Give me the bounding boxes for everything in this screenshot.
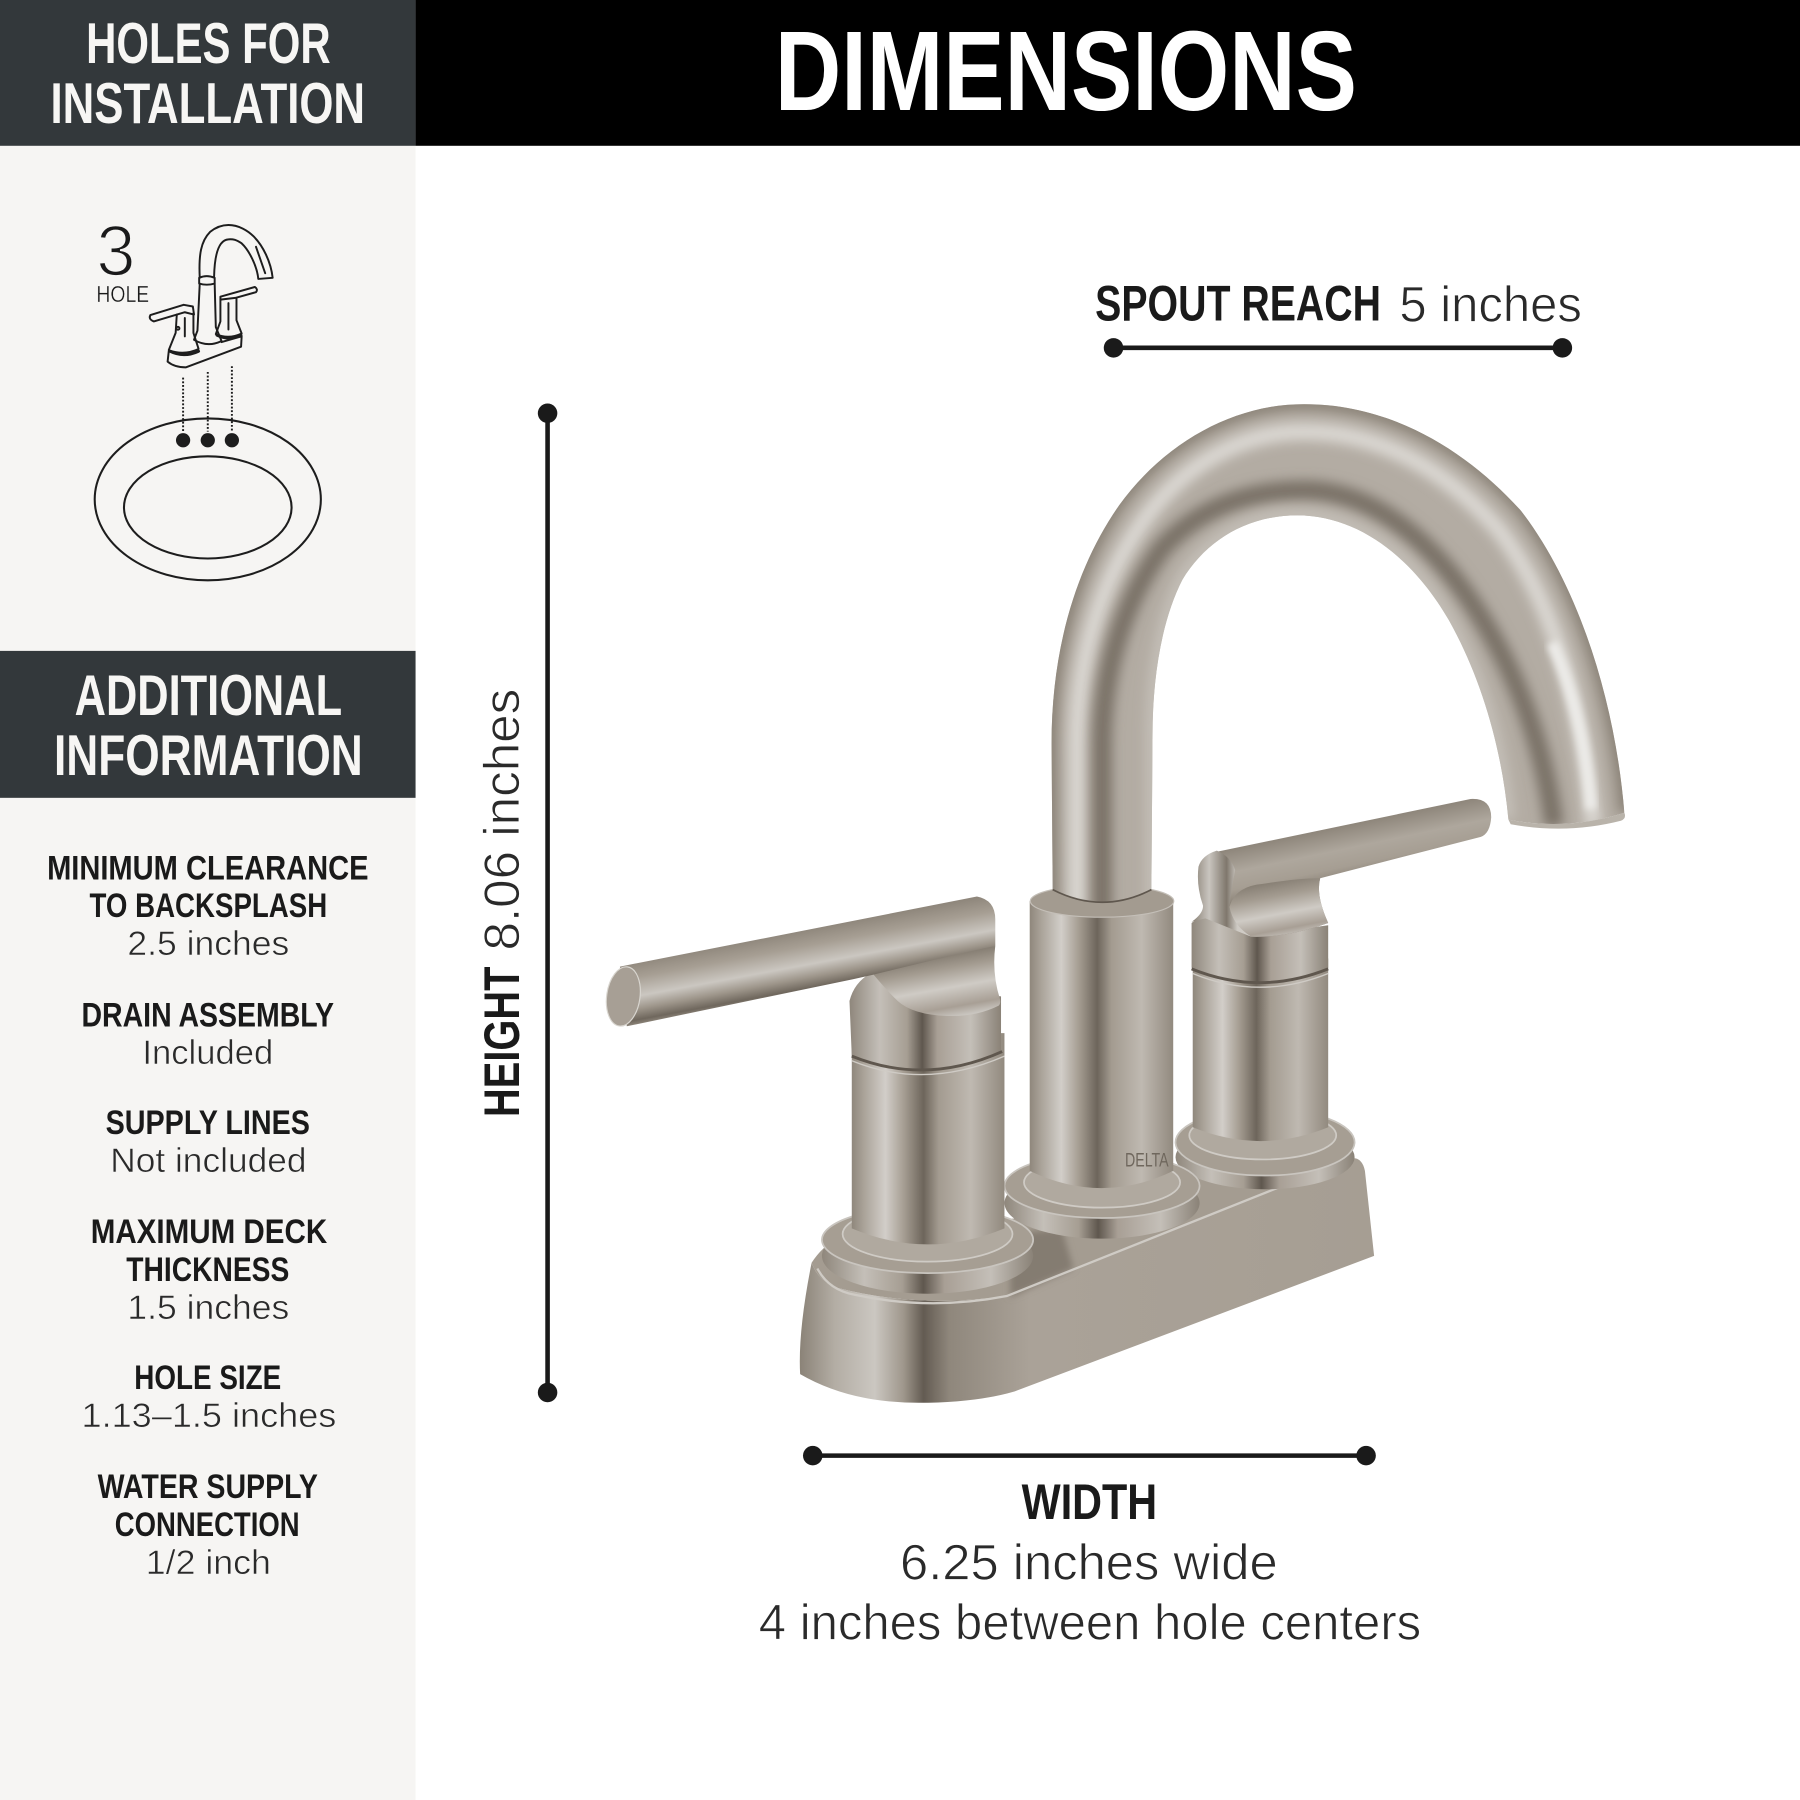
text block: drain assembly: Included	[142, 1034, 273, 1072]
panel: left sidebar	[0, 0, 416, 1800]
title banner: DIMENSIONS	[775, 8, 1357, 135]
delta logo text: DELTA	[1125, 1149, 1169, 1171]
text block: minimum clearance: TO BACKSPLASH	[90, 887, 327, 925]
text block: water supply connection: 1/2 inch	[146, 1544, 271, 1582]
faucet photo	[603, 390, 1642, 1403]
label: spout reach: 5 inches	[1399, 275, 1582, 332]
text block: maximum deck thickness: 1.5 inches	[127, 1289, 289, 1327]
arrow: spout reach dimension line	[1104, 338, 1572, 358]
text block: supply lines	[106, 1104, 310, 1180]
faucet right handle	[1176, 799, 1491, 1189]
text block: minimum clearance	[47, 849, 368, 963]
text block: maximum deck thickness: THICKNESS	[126, 1251, 289, 1289]
label: width: WIDTH	[1022, 1473, 1157, 1530]
arrow: width dimension line	[803, 1446, 1376, 1465]
faucet left handle	[603, 897, 1033, 1294]
text block: water supply connection: CONNECTION	[115, 1506, 300, 1544]
text block: maximum deck thickness: MAXIMUM DECK	[91, 1213, 327, 1251]
label: height: 8.06 inches	[473, 689, 530, 951]
text block: supply lines: SUPPLY LINES	[106, 1104, 310, 1142]
faucet spout	[1052, 404, 1624, 902]
label: width: 4 inches between hole centers	[759, 1593, 1421, 1650]
heading: additional information: ADDITIONAL	[75, 664, 342, 728]
text block: minimum clearance: MINIMUM CLEARANCE	[47, 849, 368, 887]
text block: minimum clearance: 2.5 inches	[127, 925, 289, 963]
title banner	[416, 0, 1800, 146]
icon: line drawing of faucet	[150, 225, 273, 367]
label: width	[759, 1473, 1421, 1650]
faucet spout collar line	[1053, 890, 1151, 902]
text block: water supply connection	[98, 1468, 318, 1582]
icon: dotted guide lines	[183, 366, 232, 432]
heading: holes for installation: INSTALLATION	[51, 72, 365, 136]
icon: 3 hole faucet and sink diagram	[95, 213, 321, 580]
text block: hole size: 1.13–1.5 inches	[82, 1397, 336, 1435]
faucet center body	[1004, 885, 1200, 1239]
arrow: height dimension line	[538, 404, 557, 1402]
heading: additional information	[0, 651, 416, 798]
text block: maximum deck thickness	[91, 1213, 327, 1327]
heading: additional information: INFORMATION	[54, 724, 363, 788]
heading: holes for installation	[0, 0, 416, 146]
faucet spout opening	[1508, 813, 1625, 829]
icon: 3 hole faucet and sink diagram: 3	[96, 213, 135, 292]
text block: water supply connection: WATER SUPPLY	[98, 1468, 318, 1506]
label: height: HEIGHT	[473, 966, 530, 1117]
text block: drain assembly: DRAIN ASSEMBLY	[82, 996, 334, 1034]
label: spout reach: SPOUT REACH	[1095, 274, 1381, 331]
faucet base plate	[800, 1158, 1374, 1403]
label: height	[473, 689, 530, 1117]
heading: holes for installation: HOLES FOR	[86, 12, 331, 76]
text block: hole size: HOLE SIZE	[134, 1359, 281, 1397]
icon: sink basin with holes	[95, 418, 321, 580]
text block: hole size	[82, 1359, 336, 1435]
text block: supply lines: Not included	[110, 1142, 307, 1180]
icon: 3 hole faucet and sink diagram: HOLE	[96, 281, 149, 307]
text block: drain assembly	[82, 996, 334, 1072]
label: width: 6.25 inches wide	[900, 1534, 1278, 1591]
faucet base top surface	[812, 1131, 1352, 1301]
